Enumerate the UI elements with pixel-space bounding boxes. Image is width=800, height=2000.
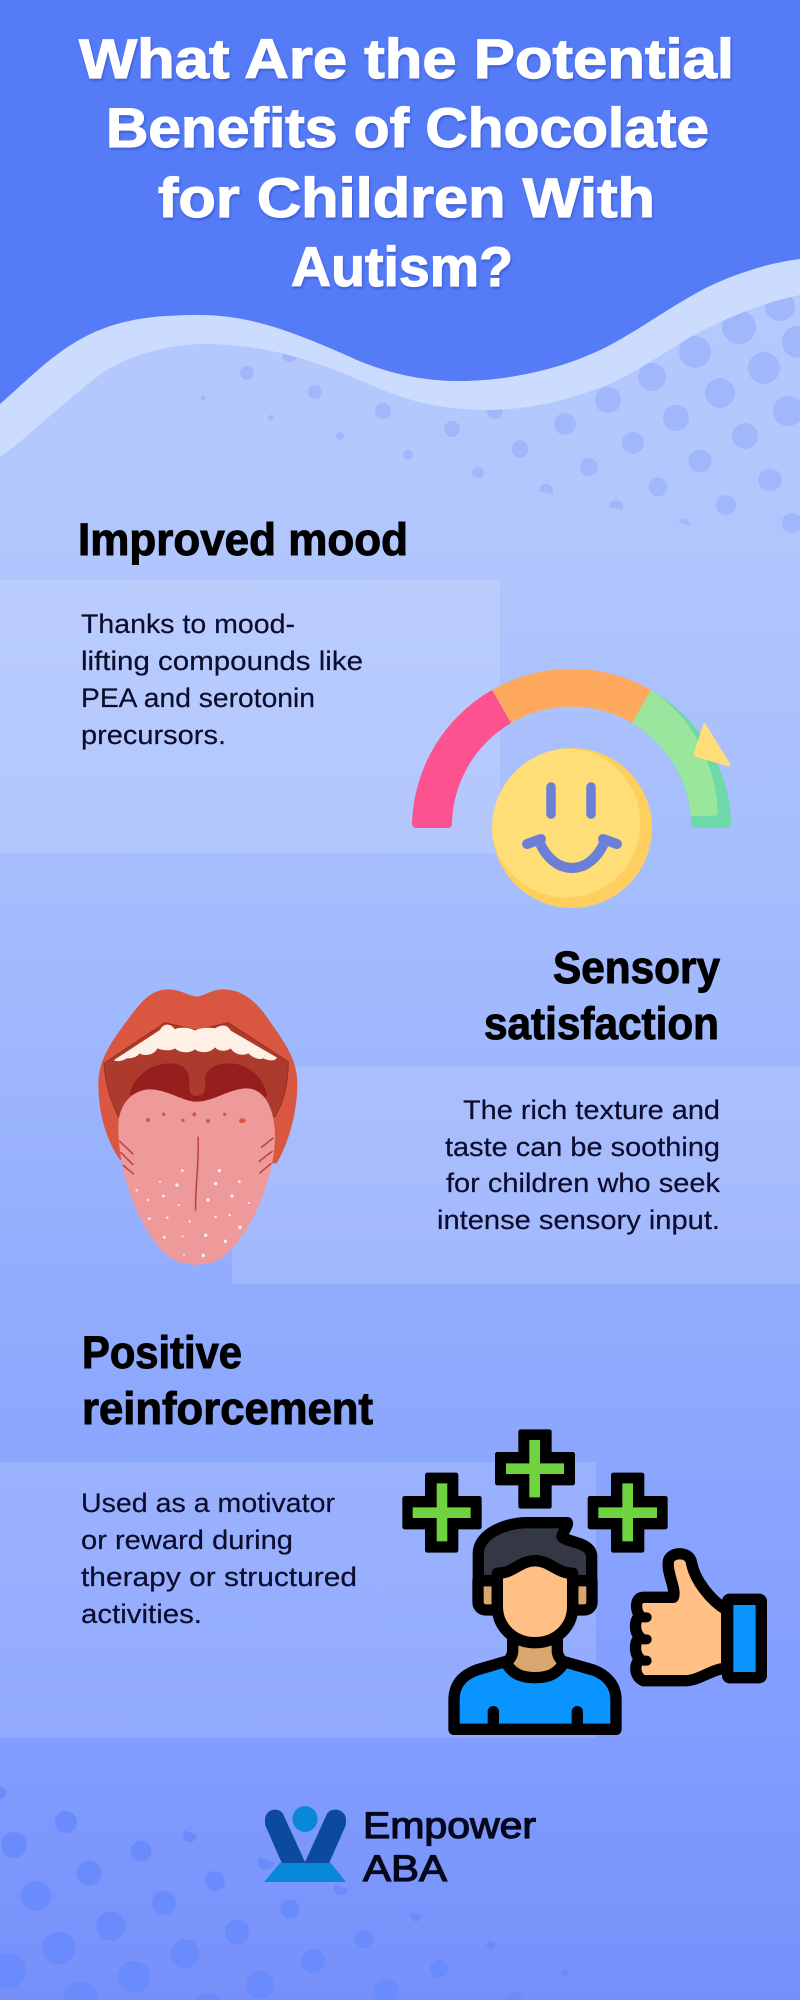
title xyxy=(79,27,734,298)
thumbs up hand xyxy=(635,1554,727,1681)
smiley face xyxy=(492,748,652,908)
mouth interior xyxy=(104,1023,288,1117)
panel: improved mood xyxy=(0,514,500,853)
text block: improved mood: precursors. xyxy=(81,720,226,750)
tongue lines xyxy=(119,1137,274,1211)
lips xyxy=(98,989,297,1163)
heading: positive reinforcement: reinforcement xyxy=(82,1383,373,1434)
title: Autism? xyxy=(291,235,513,298)
neck xyxy=(506,1640,564,1678)
tongue red dots xyxy=(146,1112,246,1123)
text block: sensory satisfaction xyxy=(437,1095,721,1235)
text block: improved mood: PEA and serotonin xyxy=(81,683,315,713)
cuff xyxy=(728,1599,761,1678)
text block: improved mood: lifting compounds like xyxy=(81,646,363,676)
logo mark xyxy=(264,1806,346,1882)
teeth xyxy=(114,1025,277,1061)
text block: positive reinforcement xyxy=(81,1488,357,1629)
plus signs xyxy=(405,1432,665,1550)
logo wordmark: Empower xyxy=(363,1805,536,1846)
heading: improved mood: Improved mood xyxy=(78,514,408,565)
gauge arc xyxy=(412,669,731,828)
face xyxy=(497,1561,573,1643)
heading: sensory satisfaction xyxy=(484,942,720,1049)
heading: positive reinforcement xyxy=(82,1327,373,1434)
logo wordmark xyxy=(363,1805,536,1889)
tongue white dots xyxy=(135,1169,250,1257)
text block: sensory satisfaction: intense sensory input. xyxy=(437,1205,720,1235)
text block: sensory satisfaction: for children who seek xyxy=(446,1168,721,1198)
text block: improved mood xyxy=(81,609,363,750)
panel: positive reinforcement xyxy=(0,1327,596,1738)
gauge pointer xyxy=(695,725,729,765)
blue header shape xyxy=(0,0,800,404)
icon: mouth and tongue xyxy=(98,989,297,1265)
text block: sensory satisfaction: taste can be soothing xyxy=(445,1132,720,1162)
text block: sensory satisfaction: The rich texture and xyxy=(463,1095,720,1125)
hair xyxy=(478,1523,592,1583)
text block: positive reinforcement: activities. xyxy=(81,1599,202,1629)
icon: child with plus signs and thumbs up xyxy=(405,1432,761,1729)
top dot pattern xyxy=(200,291,800,533)
logo: Empower ABA xyxy=(264,1805,536,1889)
throat xyxy=(129,1063,267,1107)
heading: sensory satisfaction: satisfaction xyxy=(484,998,719,1049)
text block: positive reinforcement: or reward during xyxy=(81,1525,293,1555)
light wave band xyxy=(0,259,800,457)
text block: positive reinforcement: therapy or structured xyxy=(81,1562,357,1592)
icon: mood gauge with smiley xyxy=(412,669,731,908)
panel background xyxy=(0,1462,596,1738)
title: for Children With xyxy=(158,166,655,229)
ears xyxy=(478,1581,592,1610)
text block: positive reinforcement: Used as a motivator xyxy=(81,1488,335,1518)
bottom dot pattern xyxy=(0,1787,569,2000)
logo wordmark: ABA xyxy=(363,1848,447,1889)
heading: sensory satisfaction: Sensory xyxy=(553,942,720,993)
tongue xyxy=(118,1088,275,1265)
title: What Are the Potential xyxy=(79,27,734,90)
title: Benefits of Chocolate xyxy=(106,96,709,159)
heading: positive reinforcement: Positive xyxy=(82,1327,242,1378)
panel: sensory satisfaction xyxy=(232,942,800,1284)
text block: improved mood: Thanks to mood- xyxy=(81,609,295,639)
panel background xyxy=(0,580,500,853)
body xyxy=(454,1662,616,1729)
panel background xyxy=(232,1067,800,1284)
